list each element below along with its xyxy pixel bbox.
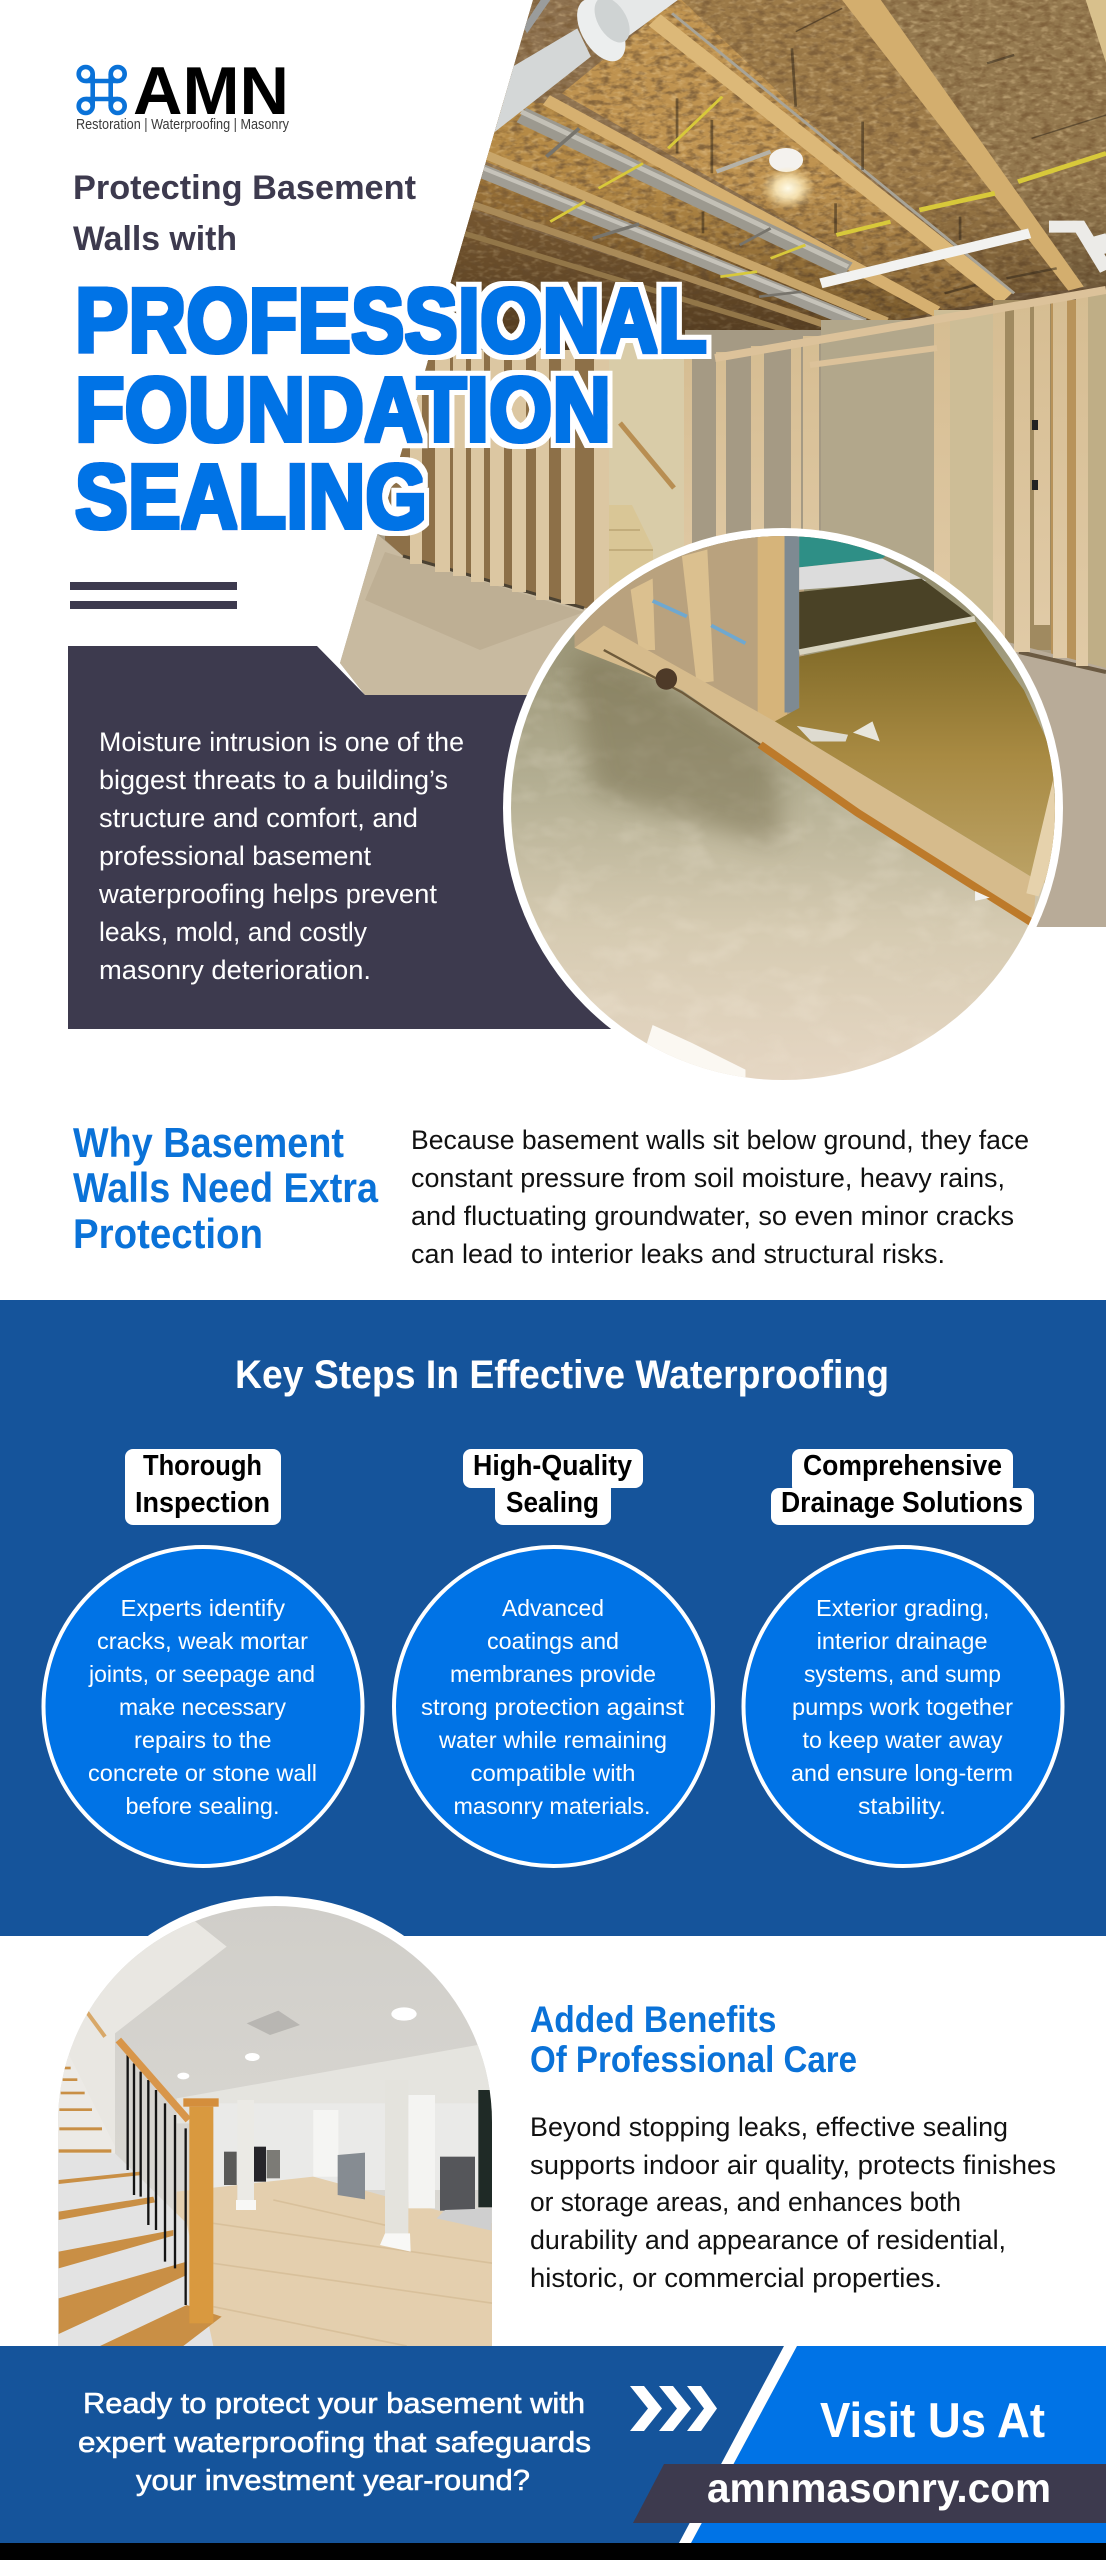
step 3 circle: systems, and sump <box>804 1661 1001 1687</box>
text: benefits paragraph: supports indoor air quality, protects finishes <box>530 2150 1056 2180</box>
text: benefits paragraph: historic, or commercial properties. <box>530 2263 942 2293</box>
step 2 circle: masonry materials. <box>454 1793 650 1819</box>
text: call to action: Ready to protect your basement with <box>83 2388 585 2420</box>
heading: added benefits: Added Benefits <box>530 1999 776 2040</box>
heading: key steps: Key Steps In Effective Waterproofing <box>235 1353 889 1397</box>
text: intro paragraph: masonry deterioration. <box>99 955 371 985</box>
text: why paragraph: constant pressure from soil moisture, heavy rains, <box>411 1163 1005 1193</box>
text: benefits paragraph: or storage areas, and enhances both <box>530 2187 961 2217</box>
step 3 circle <box>744 1547 1062 1866</box>
step 1 circle: repairs to the <box>134 1727 272 1753</box>
title <box>75 270 707 548</box>
text: why paragraph: can lead to interior leaks and structural risks. <box>411 1239 945 1269</box>
icon: command-key logo mark <box>79 67 125 113</box>
step 2 circle: coatings and <box>487 1628 619 1654</box>
text: call to action: expert waterproofing that safeguards <box>78 2427 591 2459</box>
heading: why basement walls need protection: Why Basement <box>73 1119 344 1166</box>
step 1 circle: Experts identify <box>120 1595 286 1621</box>
step 3 circle: Exterior grading, <box>816 1595 990 1621</box>
step 1 circle: cracks, weak mortar <box>97 1628 308 1654</box>
photo: unfinished basement ceiling and framing <box>330 0 1106 930</box>
heading: why basement walls need protection: Protection <box>73 1210 263 1257</box>
logo: Restoration | Waterproofing | Masonry <box>76 116 289 133</box>
step 1 label <box>125 1449 281 1525</box>
panel: call to action <box>0 2346 1106 2560</box>
icon: triple chevron arrows <box>630 2386 717 2431</box>
title: FOUNDATION <box>75 359 611 461</box>
heading: why basement walls need protection <box>73 1119 379 1257</box>
website banner <box>633 2464 1106 2523</box>
text: call to action <box>78 2388 591 2497</box>
logo: AMN <box>133 53 289 129</box>
panel: intro moisture text <box>68 646 720 1029</box>
panel: key steps band <box>0 1300 1106 1936</box>
text: intro paragraph: Moisture intrusion is one of the <box>99 727 464 757</box>
step 1 circle <box>44 1547 362 1866</box>
text: why paragraph <box>411 1125 1029 1269</box>
text: call to action: your investment year-round? <box>136 2465 530 2497</box>
step 2 circle <box>394 1547 713 1866</box>
step 2 circle: membranes provide <box>450 1661 656 1687</box>
text: intro paragraph: waterproofing helps prevent <box>98 879 438 909</box>
text: benefits paragraph: Beyond stopping leaks, effective sealing <box>530 2112 1008 2142</box>
heading: subtitle: Protecting Basement <box>73 169 416 207</box>
step 2 circle: Advanced <box>502 1595 604 1621</box>
step 1 label: Inspection <box>135 1487 270 1519</box>
step 3 circle: interior drainage <box>817 1628 988 1654</box>
step 1 label: Thorough <box>143 1450 262 1482</box>
circular photo: water-damaged basement floor <box>503 528 1063 1088</box>
step 2 label: Sealing <box>506 1487 599 1519</box>
text: visit us at: Visit Us At <box>820 2394 1045 2448</box>
step 3 label <box>771 1449 1034 1525</box>
text: intro paragraph: leaks, mold, and costly <box>99 917 368 947</box>
step 1 circle: joints, or seepage and <box>88 1661 315 1687</box>
title: SEALING <box>75 446 427 548</box>
step 2 circle: strong protection against <box>421 1694 685 1720</box>
step 3 circle: and ensure long-term <box>791 1760 1013 1786</box>
heading: why basement walls need protection: Walls Need Extra <box>73 1164 379 1211</box>
step 3 label: Comprehensive <box>803 1450 1002 1482</box>
step 2 circle: water while remaining <box>438 1727 667 1753</box>
heading: subtitle <box>73 169 416 258</box>
step 1 circle: before sealing. <box>126 1793 280 1819</box>
text: intro paragraph: biggest threats to a building’s <box>99 765 448 795</box>
step 1 circle: concrete or stone wall <box>88 1760 317 1786</box>
step 3 circle: stability. <box>858 1793 946 1819</box>
step 3 circle: pumps work together <box>792 1694 1013 1720</box>
text: why paragraph: Because basement walls sit below ground, they face <box>411 1125 1029 1155</box>
website banner: amnmasonry.com <box>707 2465 1051 2511</box>
logo <box>76 53 289 133</box>
text: intro paragraph: professional basement <box>99 841 372 871</box>
heading: subtitle: Walls with <box>73 220 237 258</box>
step 1 circle: make necessary <box>119 1694 286 1720</box>
text: intro paragraph: structure and comfort, and <box>99 803 418 833</box>
step 2 label <box>463 1449 643 1525</box>
arch photo: finished basement <box>50 1896 502 2348</box>
step 3 circle: to keep water away <box>802 1727 1003 1753</box>
step 3 label: Drainage Solutions <box>781 1487 1023 1519</box>
text: benefits paragraph <box>530 2112 1056 2293</box>
text: intro paragraph <box>98 727 464 985</box>
title: PROFESSIONAL <box>75 270 707 372</box>
heading: added benefits <box>530 1999 857 2080</box>
text: why paragraph: and fluctuating groundwater, so even minor cracks <box>411 1201 1014 1231</box>
heading: added benefits: Of Professional Care <box>530 2039 857 2080</box>
step 2 label: High-Quality <box>473 1450 632 1482</box>
framed walls <box>609 343 684 560</box>
step 2 circle: compatible with <box>470 1760 636 1786</box>
text: benefits paragraph: durability and appearance of residential, <box>530 2225 1006 2255</box>
